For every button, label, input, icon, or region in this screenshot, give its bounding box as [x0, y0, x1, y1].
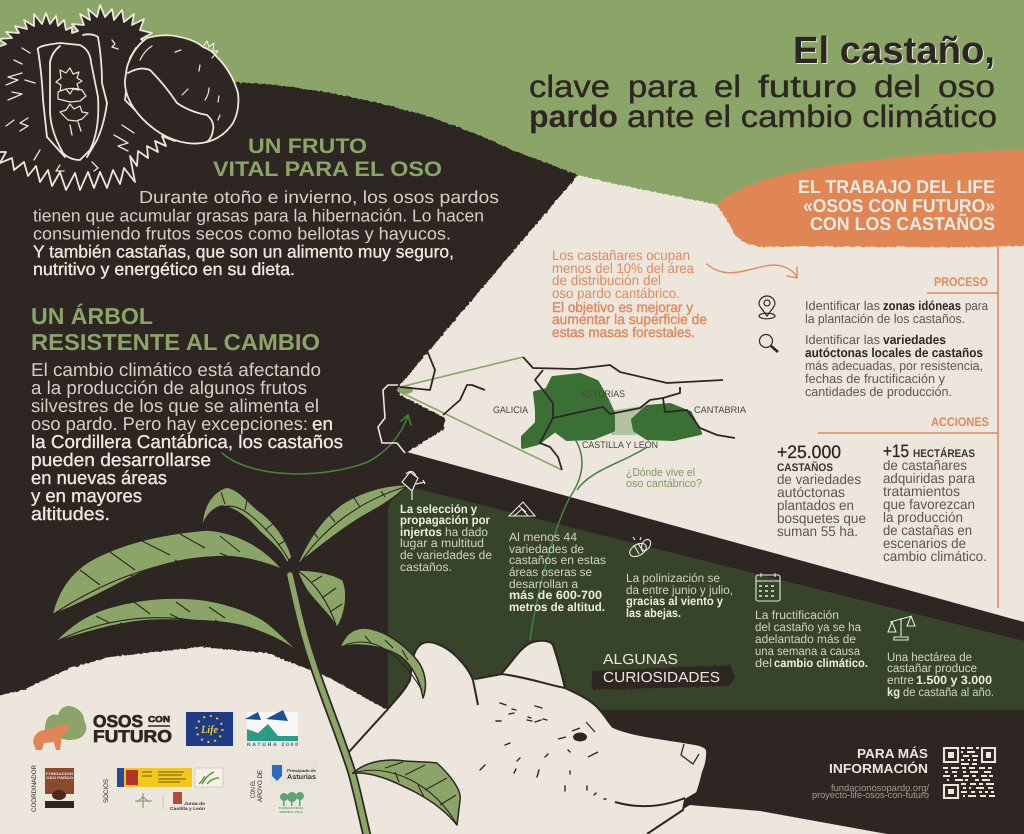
logo: fundación oso pardo: FUNDACION — [46, 772, 74, 776]
text block: árbol resistente: silvestres de los que se alimenta el — [31, 395, 319, 416]
stat: +15 hectáreas: de castañas en — [883, 522, 972, 538]
text block: curiosity fructificación: cambio climático. — [774, 656, 868, 670]
heading: el trabajo del life: CON LOS CASTAÑOS — [810, 213, 995, 234]
text block: orange distribution note: El objetivo es mejorar y — [552, 299, 693, 315]
text block: process step two: Identificar las — [805, 332, 880, 347]
text block: curiosity fructificación: adelantado más de — [755, 632, 856, 646]
heading: proceso: PROCESO — [934, 275, 988, 289]
text block: process step two — [805, 332, 983, 399]
icon: watering can — [402, 471, 425, 500]
stat: +15 hectáreas: adquiridas para — [883, 470, 975, 486]
text block: árbol resistente: oso pardo. Pero hay excepciones: — [31, 413, 308, 434]
arrow: green arrow to map of Spain — [222, 415, 411, 474]
logo: wordmark — [93, 712, 172, 746]
stat: +15 hectáreas: escenarios de — [883, 535, 966, 551]
callout: para más información: proyecto-life-osos-con-futuro — [812, 790, 929, 801]
heading: el trabajo del life: «OSOS CON FUTURO» — [803, 195, 995, 216]
heading: un árbol resistente al cambio: UN ÁRBOL — [31, 303, 153, 329]
map: region labels: CASTILLA Y LEÓN — [582, 439, 658, 451]
map: zoom triangle — [400, 357, 562, 470]
title: del — [874, 69, 921, 104]
map: cantabrian range — [378, 345, 747, 490]
text block: curiosity injertos: injertos — [400, 525, 442, 539]
stat: +15 hectáreas: +15 — [883, 441, 909, 461]
title — [529, 30, 997, 134]
map: bear range blobs — [523, 375, 700, 447]
heading: algunas curiosidades: CURIOSIDADES — [603, 670, 720, 686]
map: region borders — [400, 345, 735, 470]
heading: el trabajo del life: EL TRABAJO DEL LIFE — [798, 176, 995, 197]
stem — [290, 575, 378, 834]
text block: curiosity producción: 1.500 y 3.000 — [916, 673, 992, 687]
icon: magnifying glass — [760, 334, 778, 352]
stat: +25.000 castaños: autóctonas — [777, 484, 845, 500]
stat: +15 hectáreas: la producción — [883, 509, 963, 525]
heading: un árbol resistente al cambio: RESISTENTE AL CAMBIO — [31, 329, 320, 355]
background: dark left area — [0, 40, 578, 740]
map: region labels: CANTABRIA — [694, 405, 747, 416]
text block: fruto vital: Y también castañas, que son un alimento muy seguro, — [33, 242, 454, 262]
title: El castaño, — [794, 31, 996, 73]
logo: EU Life flag: Life — [200, 724, 218, 736]
illustration: chestnut burr and fruit — [0, 5, 238, 190]
label: coordinador: COORDINADOR — [31, 765, 38, 812]
label: con el apoyo de — [250, 769, 264, 802]
callout: para más información: fundacionosopardo.org/ — [831, 783, 929, 794]
logo: junta de castilla y león — [163, 792, 206, 811]
background: dark diagonal band — [386, 452, 1024, 834]
logo: EU Life flag — [186, 712, 233, 746]
logo: green tree — [45, 706, 86, 740]
logo: wordmark: OSOS — [93, 712, 143, 731]
panel: curiosities background — [388, 487, 1024, 710]
stat: +25.000 castaños: plantados en — [777, 497, 854, 513]
text block: orange distribution note: Los castañares ocupan — [552, 247, 690, 263]
text block: árbol resistente: altitudes. — [31, 503, 110, 524]
text block: curiosity producción: entre — [887, 673, 914, 687]
leader lines: green stems from map — [530, 439, 647, 640]
icon: location pin — [759, 296, 775, 319]
text block: fruto vital — [33, 187, 499, 279]
text block: process step two: cantidades de producción. — [805, 384, 952, 399]
text block: process step two: más adecuadas, por resistencia, — [805, 358, 983, 373]
bear: outline — [348, 641, 707, 834]
title: El castaño, — [793, 30, 995, 72]
stat: +15 hectáreas: tratamientos — [883, 483, 960, 499]
text block: curiosity polinización: La polinización se — [626, 571, 720, 585]
icon: bee — [627, 537, 652, 559]
text block: process step one: la plantación de los castaños. — [805, 311, 965, 326]
orange brush shape — [717, 150, 1024, 247]
map: caption: ¿Dónde vive el — [626, 467, 695, 479]
text block: curiosity fructificación: del castaño ya se ha — [755, 620, 861, 634]
icon: scales — [888, 616, 915, 640]
stat: +25.000 castaños — [777, 442, 866, 539]
text block: árbol resistente: y en mayores — [31, 485, 142, 506]
text block: árbol resistente — [31, 359, 343, 524]
text block: árbol resistente: la Cordillera Cantábrica, los castaños — [31, 431, 343, 452]
arrow: orange arrow to process — [707, 264, 797, 278]
label: con el apoyo de: CON EL — [250, 780, 257, 798]
text block: curiosity polinización: da entre junio y julio, — [626, 583, 733, 597]
label: socios: SOCIOS — [103, 778, 110, 803]
text block: process step two: fechas de fructificación y — [805, 371, 946, 386]
logo: fundación tierra viva — [279, 792, 304, 814]
icon: QR code — [943, 748, 995, 798]
heading: el trabajo del life — [798, 176, 995, 234]
text block: fruto vital: tienen que acumular grasas para la hibernación. Lo hacen — [33, 206, 484, 226]
map: region labels — [493, 389, 747, 451]
background: green top band — [0, 0, 1024, 230]
stat: +15 hectáreas: HECTÁREAS — [913, 447, 975, 460]
text block: curiosity altitud: castaños en estas — [509, 553, 606, 567]
logo: fundación tierra viva: FUNDACIÓN — [279, 806, 303, 810]
text block: curiosity fructificación: del — [755, 656, 772, 670]
text block: curiosity injertos: La selección y — [400, 502, 477, 516]
map: locator blob — [397, 386, 413, 394]
leaf: small below — [297, 570, 346, 628]
stat: +15 hectáreas — [883, 441, 987, 564]
icon: mountains — [509, 502, 535, 516]
text block: curiosity polinización: gracias al viento y — [626, 594, 723, 608]
text block: curiosity altitud — [509, 530, 606, 614]
heading: un árbol resistente al cambio — [31, 303, 320, 355]
heading: un fruto vital para el oso: VITAL PARA EL OSO — [213, 158, 442, 181]
map: caption — [626, 467, 702, 490]
text block: process step two: variedades — [883, 332, 946, 347]
label: con el apoyo de: APOYO DE — [257, 769, 264, 802]
callout: para más información: PARA MÁS — [857, 746, 928, 761]
heading: un fruto vital para el oso — [213, 135, 442, 181]
bear: fur marks — [480, 703, 606, 799]
text block: curiosity fructificación — [755, 608, 868, 670]
text block: curiosity injertos: propagación por — [400, 513, 490, 527]
text block: curiosity altitud: Al menos 44 — [509, 530, 577, 544]
text block: curiosity injertos — [400, 502, 492, 574]
text block: orange distribution note: de distribución del — [552, 272, 661, 288]
logo: orange bear — [33, 724, 70, 750]
text block: curiosity producción: de castaña al año. — [903, 685, 994, 699]
logo: fundación biodiversidad — [195, 768, 223, 787]
title: ante el cambio climático — [627, 99, 997, 134]
text block: process step one: zonas idóneas — [883, 298, 961, 313]
text block: curiosity producción: kg — [887, 685, 900, 699]
panel: process and actions rules — [818, 247, 998, 608]
callout: para más información — [812, 746, 929, 801]
stat: +15 hectáreas: cambio climático. — [883, 548, 987, 564]
logo: government of Spain — [117, 768, 192, 787]
background: cream hill and bear body — [0, 647, 400, 834]
text block: process step one: para — [965, 298, 989, 313]
map: region labels: GALICIA — [493, 405, 529, 416]
logo: fundación oso pardo — [45, 768, 74, 808]
leaf: hanging right — [340, 628, 425, 698]
logo: principado de asturias — [270, 760, 318, 784]
leaf: upper curled — [202, 487, 292, 563]
logo: ministerio emblem — [135, 793, 152, 808]
text block: curiosity injertos: castaños. — [400, 560, 452, 574]
text block: curiosity altitud: desarrollan a — [509, 577, 578, 591]
leaf: top right — [297, 485, 408, 568]
text block: process step one — [805, 298, 989, 326]
stat: +15 hectáreas: que favorezcan — [883, 496, 975, 512]
stat: +25.000 castaños: bosquetes que — [777, 510, 866, 526]
title: el — [714, 69, 741, 104]
heading: acciones: ACCIONES — [931, 415, 989, 429]
text block: orange distribution note: oso pardo cantábrico. — [552, 285, 680, 301]
logo: principado de asturias: Principado de — [287, 768, 317, 773]
text block: fruto vital: nutritivo y energético en su dieta. — [33, 259, 295, 279]
logo: fundación oso pardo: OSO PARDO — [46, 776, 73, 780]
leaf: large left — [52, 530, 283, 615]
text block: orange distribution note: aumentar la superficie de — [552, 311, 707, 327]
logo: Natura 2000 — [245, 710, 298, 748]
text block: curiosity fructificación: una semana a causa — [755, 644, 860, 658]
text block: curiosity polinización — [626, 571, 733, 620]
text block: árbol resistente: en — [312, 413, 333, 434]
text block: curiosity altitud: áreas oseras se — [509, 565, 592, 579]
heading: algunas curiosidades — [592, 652, 735, 690]
text block: process step one: Identificar las — [805, 298, 880, 313]
text block: árbol resistente: a la producción de algunos frutos — [31, 377, 307, 398]
illustration: bear head — [348, 641, 707, 834]
text block: curiosity producción: Una hectárea de — [887, 650, 972, 664]
text block: curiosity polinización: las abejas. — [626, 606, 681, 620]
bear: head fill — [348, 641, 707, 834]
text block: orange distribution note: estas masas forestales. — [552, 324, 695, 340]
text block: fruto vital: consumiendo frutos secos como bellotas y hayucos. — [33, 224, 451, 244]
logo: wordmark: FUTURO — [93, 727, 172, 746]
text block: curiosity altitud: más de 600-700 — [509, 588, 602, 602]
logo: principado de asturias: Asturias — [287, 773, 316, 781]
logo: osos con futuro — [33, 706, 172, 750]
leaf: lower right — [353, 760, 460, 825]
text block: curiosity injertos: ha dado — [445, 525, 488, 539]
text block: curiosity fructificación: La fructificación — [755, 608, 839, 622]
heading: un fruto vital para el oso: UN FRUTO — [248, 135, 367, 158]
background: cream strip bottom right — [640, 805, 887, 834]
logo: Natura 2000: NATURA 2000 — [247, 742, 298, 748]
stat: +25.000 castaños: +25.000 — [777, 442, 841, 462]
stat: +25.000 castaños: CASTAÑOS — [777, 461, 833, 474]
title: pardo — [529, 99, 618, 134]
leaf: long lower — [55, 598, 300, 655]
text block: orange distribution note: menos del 10% del área — [552, 260, 694, 276]
text block: curiosity producción — [887, 650, 994, 699]
callout: para más información: INFORMACIÓN — [829, 761, 928, 776]
text block: curiosity producción: castañar produce — [887, 661, 977, 675]
logo: junta de castilla y león: Junta de — [184, 801, 206, 806]
logo: junta de castilla y león: Castilla y León — [170, 806, 205, 811]
icon: calendar — [756, 573, 780, 601]
text block: árbol resistente: pueden desarrollarse — [31, 449, 211, 470]
text block: curiosity altitud: variedades de — [509, 542, 584, 556]
stat: +25.000 castaños: de variedades — [777, 471, 861, 487]
text block: fruto vital: Durante otoño e invierno, los osos pardos — [139, 187, 499, 207]
stat: +15 hectáreas: de castañares — [883, 457, 967, 473]
bear: eye — [558, 722, 699, 764]
title: clave — [529, 69, 610, 104]
map: region labels: ASTURIAS — [581, 389, 625, 400]
map: caption: oso cantábrico? — [626, 478, 702, 490]
title: futuro — [758, 69, 857, 104]
panel: orange blob heading — [717, 150, 1024, 247]
text block: árbol resistente: en nuevas áreas — [31, 467, 167, 488]
text block: orange distribution note — [552, 247, 707, 340]
logo: fundación tierra viva: TIERRA VIVA — [279, 810, 304, 814]
logo: wordmark: CON — [148, 714, 170, 724]
text block: process step two: autóctonas locales de castaños — [805, 345, 983, 360]
text block: árbol resistente: El cambio climático está afectando — [31, 359, 321, 380]
title: oso — [938, 69, 995, 104]
map: white outline of the peninsula — [378, 385, 405, 453]
heading: algunas curiosidades: ALGUNAS — [603, 652, 678, 668]
title: para — [628, 69, 698, 104]
text block: curiosity altitud: metros de altitud. — [509, 600, 605, 614]
text block: curiosity injertos: de variedades de — [400, 548, 492, 562]
illustration: chestnut branch and leaves — [52, 485, 460, 834]
text block: curiosity injertos: lugar a multitud — [400, 536, 484, 550]
stat: +25.000 castaños: suman 55 ha. — [777, 523, 858, 539]
